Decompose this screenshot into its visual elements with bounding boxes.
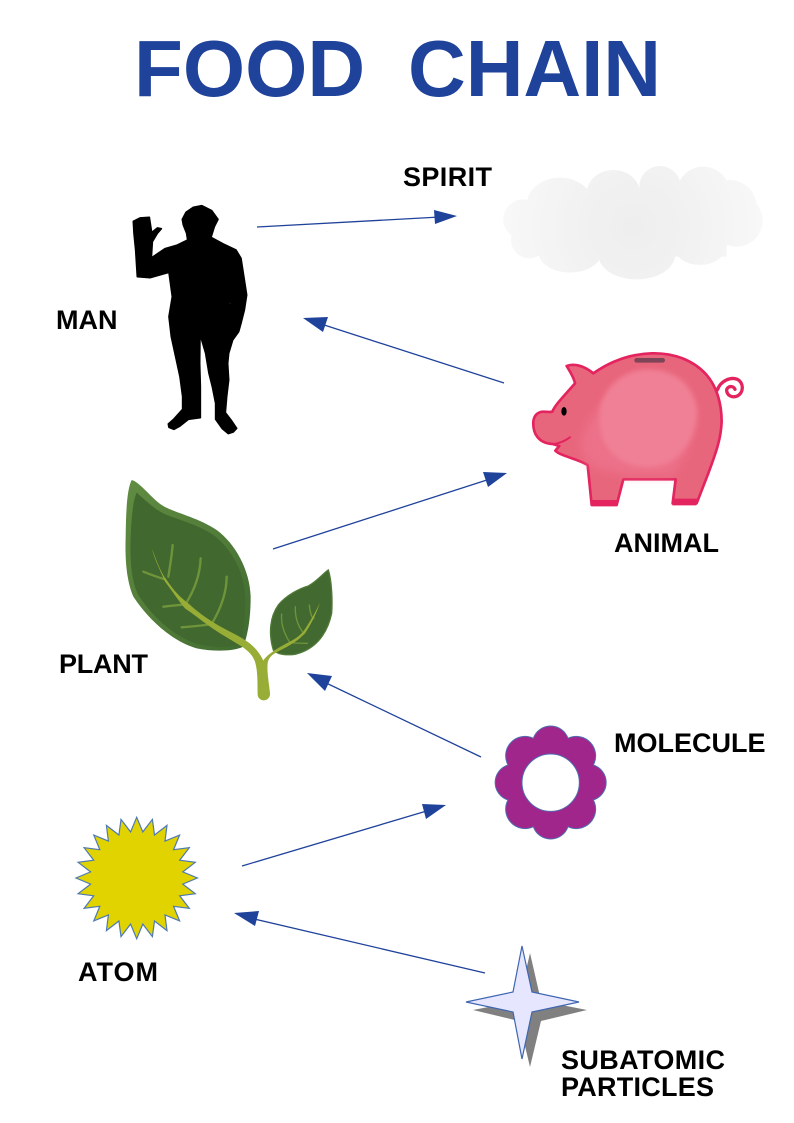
label: subatomic particles: PARTICLES [561, 1072, 714, 1102]
label: atom: ATOM [78, 957, 158, 987]
large leaf inner [130, 493, 245, 647]
pig eye [561, 407, 567, 416]
icon: four-point star [466, 946, 587, 1067]
arrow: man to spirit [257, 210, 457, 227]
large leaf [125, 480, 251, 651]
pig belly highlight [599, 369, 697, 467]
label: man: MAN [56, 305, 118, 335]
icon: atom starburst [76, 817, 197, 939]
label: subatomic particles: SUBATOMIC [561, 1045, 725, 1075]
icon: cloud [503, 166, 763, 279]
icon: man silhouette [133, 206, 247, 434]
title [134, 24, 661, 113]
arrow: molecule to plant [307, 673, 481, 757]
arrow: subatomic to atom [234, 911, 485, 973]
label: plant: PLANT [59, 649, 148, 679]
pig slot [634, 358, 665, 363]
label: animal: ANIMAL [614, 528, 719, 558]
star shadow [473, 953, 587, 1067]
title: CHAIN [408, 24, 661, 113]
pig body [533, 353, 722, 505]
label: molecule: MOLECULE [614, 728, 766, 758]
title: FOOD [134, 24, 365, 113]
arrow: animal to man [303, 317, 504, 383]
icon: pig [533, 353, 742, 506]
small leaf veins [282, 605, 314, 643]
label: subatomic particles [561, 1045, 725, 1102]
arrow: plant to animal [273, 472, 507, 549]
star face [466, 946, 579, 1059]
pig tail [717, 379, 742, 397]
pig mouth [553, 437, 570, 444]
label: spirit: SPIRIT [403, 162, 492, 192]
arrow: atom to molecule [242, 804, 446, 866]
icon: plant [125, 480, 332, 700]
stem and midrib [152, 548, 320, 700]
large leaf veins [143, 545, 227, 627]
icon: molecule flower [495, 726, 606, 839]
small leaf [271, 570, 332, 655]
pig feet [591, 499, 698, 506]
pig lower belly [580, 395, 695, 475]
